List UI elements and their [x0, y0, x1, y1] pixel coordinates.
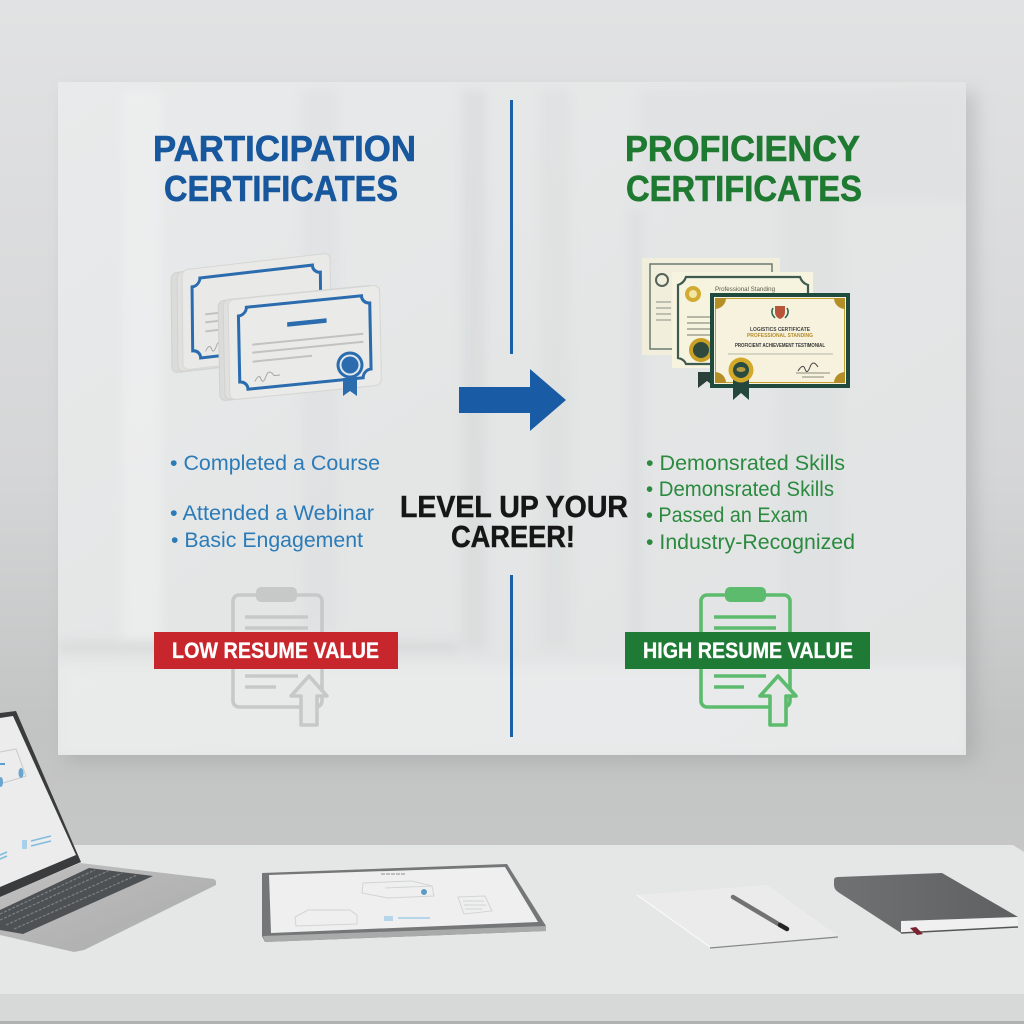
- arrow: participation to proficiency: [459, 369, 566, 431]
- front certificate: [710, 293, 850, 388]
- laptop base: [0, 863, 216, 952]
- panel shadow: [66, 92, 976, 762]
- callout: level up your career: LEVEL UP YOUR: [400, 489, 628, 524]
- middle certificate: [672, 272, 813, 368]
- badge: low resume value: [154, 632, 398, 669]
- back ribbon: [698, 372, 716, 388]
- text block: proficiency bullets: • Demonsrated Skills: [646, 478, 834, 501]
- heading: proficiency certificates: CERTIFICATES: [626, 168, 862, 209]
- back certificate: [642, 258, 780, 355]
- callout: level up your career: [400, 489, 628, 554]
- badge: high resume value: HIGH RESUME VALUE: [643, 638, 853, 663]
- window reflections: [64, 94, 481, 650]
- badge: high resume value: [625, 632, 870, 669]
- text block: proficiency bullets: • Demonsrated Skills: [646, 452, 845, 475]
- icon: grey resume clipboard: [233, 587, 327, 725]
- text block: proficiency bullets: [646, 452, 855, 554]
- heading: participation certificates: PARTICIPATION: [153, 128, 416, 169]
- notebook with pen: [637, 885, 838, 948]
- front certificate: LOGISTICS CERTIFICATE: [750, 327, 811, 333]
- tablet screen icons: [295, 874, 492, 926]
- callout: level up your career: CAREER!: [451, 519, 575, 554]
- icon: proficiency certificate stack: [642, 258, 850, 400]
- ribbon seal: [336, 352, 364, 396]
- heading: proficiency certificates: [625, 128, 862, 209]
- front certificate: PROFESSIONAL STANDING: [747, 333, 813, 339]
- back stack: [171, 253, 331, 373]
- text block: participation bullets: • Attended a Webinar: [170, 502, 374, 525]
- bookmark: [910, 927, 923, 935]
- text block: proficiency bullets: • Industry-Recognized: [646, 531, 855, 554]
- laptop: [0, 711, 216, 952]
- desk: [0, 845, 1024, 1024]
- middle certificate: Professional Standing: [715, 287, 775, 293]
- text block: participation bullets: • Completed a Course: [170, 452, 380, 475]
- text block: participation bullets: [170, 452, 380, 552]
- infographic panel: [58, 82, 966, 755]
- icon: green resume clipboard: [701, 587, 796, 725]
- icon: participation certificate stack: [171, 253, 382, 401]
- pen: [733, 897, 787, 929]
- badge: low resume value: LOW RESUME VALUE: [172, 638, 379, 663]
- tablet: [262, 864, 546, 942]
- heading: participation certificates: CERTIFICATES: [164, 168, 398, 209]
- text block: proficiency bullets: • Passed an Exam: [646, 504, 808, 527]
- tablet screen: [269, 867, 538, 933]
- text block: participation bullets: • Basic Engagement: [171, 529, 363, 552]
- laptop screen: [0, 711, 81, 897]
- laptop keyboard: [0, 868, 153, 934]
- closed book: [834, 873, 1018, 935]
- front stack: [218, 285, 382, 401]
- heading: participation certificates: [153, 128, 416, 209]
- laptop screen content: [0, 749, 51, 859]
- heading: proficiency certificates: PROFICIENCY: [625, 128, 860, 169]
- front certificate: PROFICIENT ACHIEVEMENT TESTIMONIAL: [735, 343, 826, 349]
- front seal and ribbon: [728, 358, 754, 400]
- center divider bottom: [510, 575, 513, 737]
- center divider top: [510, 100, 513, 354]
